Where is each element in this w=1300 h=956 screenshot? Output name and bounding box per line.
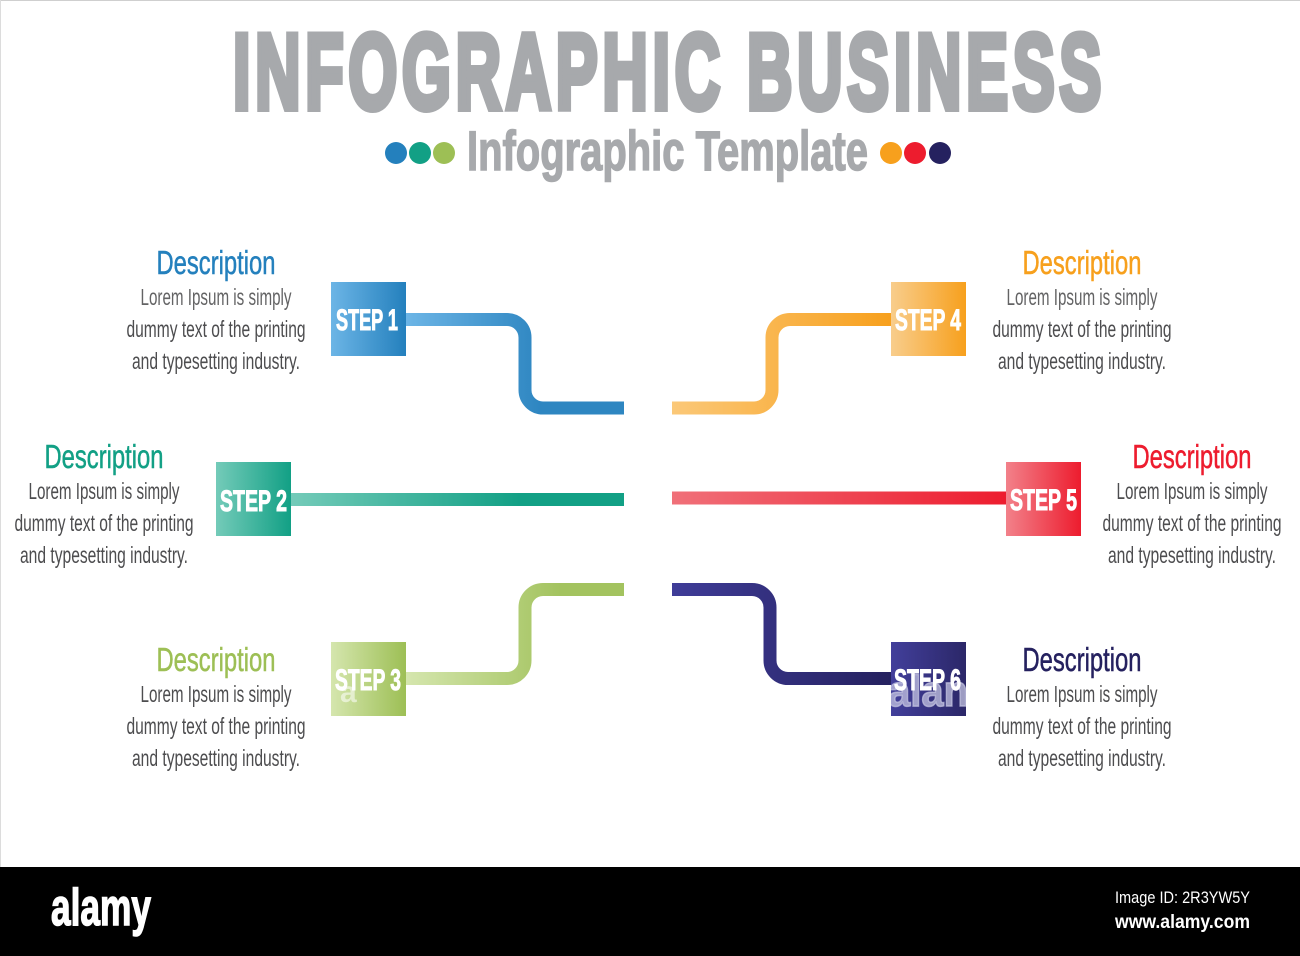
body text 3: and typesetting industry. xyxy=(132,745,300,771)
connector 3 xyxy=(406,590,624,678)
body text 6: Lorem Ipsum is simply xyxy=(1006,681,1158,707)
connector 1 xyxy=(406,320,624,408)
step box 1 xyxy=(331,282,406,356)
subtitle text: Infographic Template xyxy=(467,119,868,182)
body text 4: and typesetting industry. xyxy=(998,348,1166,374)
connector 5 xyxy=(672,492,1006,504)
description heading 4: Description xyxy=(1022,244,1142,281)
left dots xyxy=(385,142,455,164)
footer bar xyxy=(0,867,1300,956)
body text 3: dummy text of the printing xyxy=(126,713,306,739)
step box 4 xyxy=(891,282,966,356)
body text 5 xyxy=(1102,478,1282,568)
step box 4: STEP 4 xyxy=(895,304,961,337)
body text 1: dummy text of the printing xyxy=(126,316,306,342)
description heading 5: Description xyxy=(1132,438,1252,475)
step box 5: STEP 5 xyxy=(1010,484,1077,517)
body text 4 xyxy=(992,284,1172,374)
image id: Image ID: 2R3YW5Y xyxy=(1115,888,1250,907)
panel: step 2 xyxy=(14,438,624,568)
step box 3: a xyxy=(340,676,357,709)
step box 3 xyxy=(331,642,406,716)
description heading 2: Description xyxy=(44,438,164,475)
description heading 6: Description xyxy=(1022,641,1142,678)
body text 1: Lorem Ipsum is simply xyxy=(140,284,292,310)
body text 6 xyxy=(992,681,1172,771)
panel: step 1 xyxy=(126,244,624,408)
body text 4: dummy text of the printing xyxy=(992,316,1172,342)
body text 1 xyxy=(126,284,306,374)
description heading 3: Description xyxy=(156,641,276,678)
panel: step 4 xyxy=(672,244,1172,408)
step box 2: STEP 2 xyxy=(220,485,287,518)
subtitle xyxy=(385,119,951,182)
panel: step 3 xyxy=(126,590,624,771)
connector 4 xyxy=(672,320,891,408)
body text 3 xyxy=(126,681,306,771)
body text 2: and typesetting industry. xyxy=(20,542,188,568)
panel: step 6 xyxy=(672,590,1172,771)
body text 3: Lorem Ipsum is simply xyxy=(140,681,292,707)
body text 6: dummy text of the printing xyxy=(992,713,1172,739)
alamy logo: alamy xyxy=(51,879,151,937)
step box 6: alan xyxy=(888,667,968,716)
body text 4: Lorem Ipsum is simply xyxy=(1006,284,1158,310)
body text 2: dummy text of the printing xyxy=(14,510,194,536)
body text 2 xyxy=(14,478,194,568)
step box 1: STEP 1 xyxy=(336,304,398,337)
step box 2 xyxy=(216,462,291,536)
connector 2 xyxy=(291,493,624,506)
connector 6 xyxy=(672,590,891,678)
step box 3: STEP 3 xyxy=(335,664,401,697)
panel: step 5 xyxy=(672,438,1282,568)
body text 6: and typesetting industry. xyxy=(998,745,1166,771)
step box 5 xyxy=(1006,462,1081,536)
body text 1: and typesetting industry. xyxy=(132,348,300,374)
step box 6 xyxy=(888,642,968,716)
description heading 1: Description xyxy=(156,244,276,281)
step box 6: STEP 6 xyxy=(894,664,961,697)
right dots xyxy=(880,142,951,164)
body text 2: Lorem Ipsum is simply xyxy=(28,478,180,504)
website: www.alamy.com xyxy=(1114,912,1250,933)
